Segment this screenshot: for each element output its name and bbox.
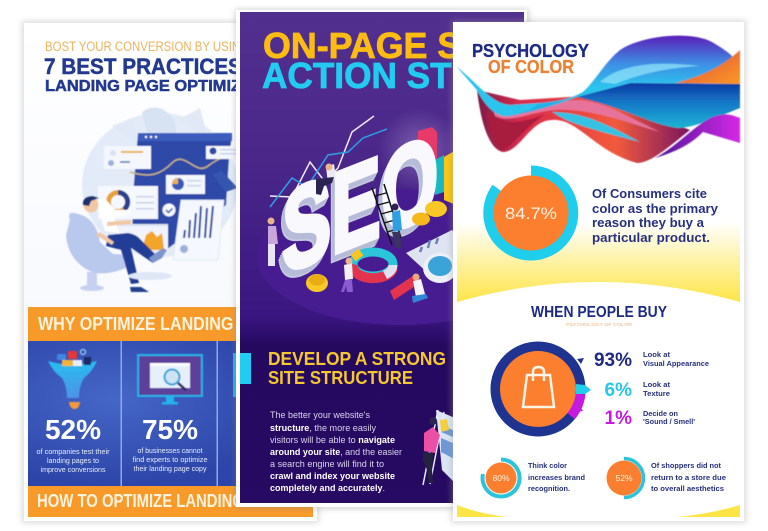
stat: 93%: Look at	[643, 350, 671, 359]
ladder and climber	[372, 184, 402, 248]
stat: 6%: Look at	[643, 380, 671, 389]
banner: why optimize: WHY OPTIMIZE LANDING PAGES	[38, 314, 293, 334]
stat: 1%	[605, 408, 695, 429]
stat: 52%	[36, 414, 110, 474]
person sitting on e	[316, 164, 336, 195]
stat: 52%: improve conversions	[40, 465, 106, 474]
card: check badge	[162, 204, 176, 216]
heading: develop a strong site structure: DEVELOP A STRONG	[268, 348, 446, 369]
heading: develop a strong site structure: SITE STRUCTURE	[268, 367, 413, 388]
donut stat: 84.7%: 84.7%	[505, 205, 557, 223]
title: OF COLOR	[488, 57, 574, 77]
text block: structure body: around your site, and the easier	[270, 447, 402, 458]
person with tablet	[341, 258, 353, 292]
text block: structure body: visitors will be able to navigate	[270, 435, 395, 446]
stat: 75%: 75%	[142, 414, 198, 445]
text block: consumers: particular product.	[592, 230, 710, 245]
illustration: seo isometric	[257, 108, 543, 325]
stat: 6%	[605, 380, 671, 401]
donut stat: 84.7%	[489, 171, 573, 255]
donut stat: 52%	[606, 458, 644, 498]
title	[472, 41, 589, 77]
icon: third column	[233, 353, 263, 397]
donut chart: when people buy	[496, 346, 591, 432]
illustration: analyst with dashboards	[66, 108, 238, 292]
text block: consumers: Of Consumers cite	[592, 186, 707, 201]
heading: when people buy: PSYCHOLOGY OF COLOR	[566, 322, 633, 327]
yellow band	[457, 222, 740, 302]
card: area chart	[118, 224, 168, 251]
text block: structure body: The better your website's	[270, 410, 370, 421]
text block: brand recognition: Think color	[528, 461, 567, 470]
stat: 93%: 93%	[594, 350, 632, 371]
line charts	[270, 116, 387, 207]
panel: psychology of color	[451, 20, 746, 523]
seo letters: SEO	[282, 109, 438, 298]
stat: 1%: 'Sound / Smell'	[643, 417, 695, 426]
donut chart	[353, 252, 393, 278]
stat: 75%: their landing page copy	[134, 464, 207, 473]
text block: consumers	[592, 186, 719, 245]
subtitle: BOST YOUR CONVERSION BY USING	[45, 39, 249, 54]
text block: shoppers: Of shoppers did not	[651, 461, 721, 470]
text block: shoppers: to overall aesthetics	[651, 484, 724, 493]
character in armchair	[66, 196, 167, 292]
text block: consumers: color as the primary	[592, 201, 719, 216]
stat: 75%: find experts to optimize	[132, 455, 208, 464]
stat: 75%: of businesses cannot	[138, 446, 203, 455]
stat: 1%: Decide on	[643, 409, 678, 418]
icon: monitor with magnifier	[138, 355, 202, 404]
card: legend	[104, 146, 151, 169]
title: PSYCHOLOGY	[472, 41, 589, 61]
stat: 75%	[132, 414, 208, 473]
heading: develop a strong site structure	[268, 348, 446, 388]
heading: when people buy	[531, 304, 668, 327]
panel: on-page seo	[235, 9, 543, 509]
title	[44, 54, 291, 95]
coins	[306, 201, 447, 292]
person with laptop and red cylinder	[390, 274, 428, 303]
donut stat: 80%: 80%	[492, 473, 510, 483]
heading: when people buy: WHEN PEOPLE BUY	[531, 304, 668, 321]
stat: 93%	[594, 350, 709, 371]
text block: brand recognition	[528, 461, 585, 493]
card: check	[206, 146, 238, 159]
banner: how to optimize: HOW TO OPTIMIZE LANDING PAGES	[37, 491, 299, 511]
text block: structure body: structure, the more easily	[270, 423, 376, 434]
text block: structure body: crawl and index your website	[270, 471, 395, 482]
text block: brand recognition: increases brand	[528, 473, 585, 482]
title: ACTION STEPS	[262, 55, 522, 96]
text block: structure body	[270, 410, 402, 494]
card: bar chart	[173, 200, 224, 260]
card: donut chart	[98, 186, 158, 219]
banner: how to optimize	[28, 486, 313, 517]
text block: brand recognition: recognition.	[528, 484, 570, 493]
title	[262, 25, 522, 96]
stat: 52%: landing pages to	[47, 456, 99, 465]
text block: shoppers: return to a store due	[651, 473, 726, 482]
stat: 52%: 52%	[45, 414, 101, 445]
bar blocks	[418, 127, 456, 205]
illustration: person at board	[423, 410, 460, 488]
panel: stat columns	[28, 341, 313, 486]
title: LANDING PAGE OPTIMIZATION	[45, 78, 291, 95]
donut stat: 80%	[483, 459, 520, 496]
icon: funnel	[48, 350, 97, 409]
person on left	[268, 218, 278, 266]
title: ON-PAGE SEO	[263, 25, 513, 66]
card: pie	[166, 175, 205, 194]
stat: 1%: 1%	[605, 408, 632, 429]
text block: consumers: reason they buy a	[592, 215, 705, 230]
stat: 6%: 6%	[605, 380, 632, 401]
paper and magnifier	[406, 230, 470, 283]
stat: 6%: Texture	[643, 389, 670, 398]
stat: 52%: of companies test their	[36, 447, 110, 456]
accent: cyan tab	[240, 353, 251, 384]
text block: structure body: a search engine will find it to	[270, 459, 384, 470]
stat: 93%: Visual Appearance	[643, 359, 709, 368]
text block: structure body: completely and accurately.	[270, 483, 385, 494]
banner: why optimize	[28, 307, 313, 341]
donut stat: 52%: 52%	[615, 473, 633, 483]
title: 7 BEST PRACTICES	[44, 54, 242, 79]
color ribbon	[457, 36, 740, 163]
panel: landing page optimization	[22, 21, 319, 523]
text block: shoppers	[651, 461, 726, 493]
icon: shopping bag	[523, 367, 554, 407]
footer yellow corners	[457, 505, 740, 517]
